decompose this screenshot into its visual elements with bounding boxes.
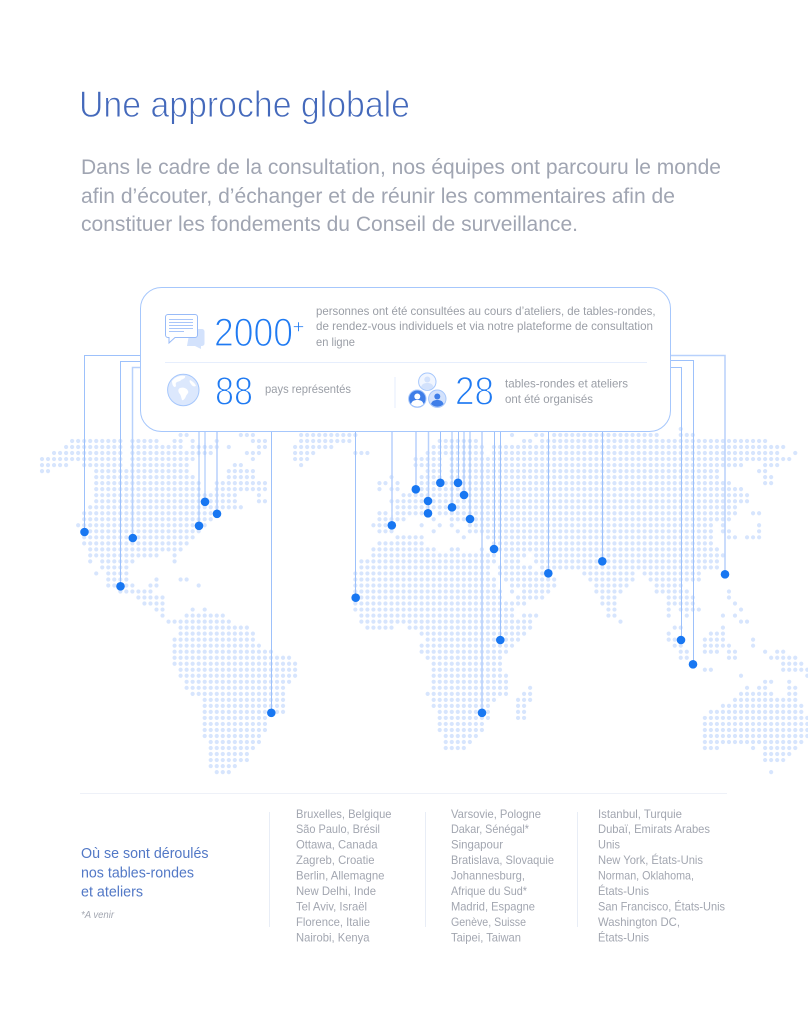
text: consultation description: personnes ont été consultées au cours d’ateliers, de tables-rondes, [316,304,656,318]
panel: key figures [140,288,670,432]
city list: column 3: Norman, Oklahoma, [598,869,694,883]
city list: column 1: Zagreb, Croatie [296,853,375,867]
intro paragraph: constituer les fondements du Conseil de surveillance. [81,213,578,236]
stat: 88: 88 [215,370,253,414]
city list: column 3: San Francisco, États-Unis [598,898,725,914]
city list: column 2: Bratislava, Slovaquie [451,853,554,867]
city list: column 3: New York, États-Unis [598,852,703,867]
city list: column 2: Dakar, Sénégal* [451,822,529,836]
city list: column 2: Afrique du Sud* [451,884,527,898]
text: tables-rondes et ateliers [505,376,628,406]
city list: column 1: Berlin, Allemagne [296,869,385,883]
text: pays représentés: pays représentés [265,382,351,396]
connector lines [84,356,725,713]
city list: column 1: New Delhi, Inde [296,884,376,898]
city list: column 2: Johannesburg, [451,869,525,883]
text: consultation description: en ligne [316,335,355,349]
city list: column 1: Tel Aviv, Israël [296,900,367,914]
city list: column 2: Genève, Suisse [451,915,526,929]
city list: column 1: Ottawa, Canada [296,838,378,852]
location pins [80,478,729,717]
city list: column 1: Bruxelles, Belgique [296,807,392,821]
heading: locations: Où se sont déroulés [81,846,208,862]
title: Une approche globale [79,84,410,125]
stat: 2000+: + [292,317,304,338]
text: consultation description: de rendez-vous individuels et via notre plateforme de consultation [316,319,653,333]
dotted world map [42,429,807,772]
city list: column 1: Florence, Italie [296,915,370,929]
icon: globe [168,374,199,406]
city list: column 1: Nairobi, Kenya [296,930,370,944]
city list: column 3: États-Unis [598,929,649,944]
intro paragraph: afin d’écouter, d’échanger et de réunir les commentaires afin de [81,185,675,208]
city list: column 2: Singapour [451,838,503,852]
footnote: *A venir [81,909,114,921]
city list: column 2: Madrid, Espagne [451,900,535,914]
intro paragraph: Dans le cadre de la consultation, nos équipes ont parcouru le monde [81,156,721,179]
city list: column 3: Washington DC, [598,915,680,929]
icon: chat bubbles [166,314,204,349]
city list: column 3: Istanbul, Turquie [598,807,682,821]
text: tables-rondes et ateliers: tables-rondes et ateliers [505,376,628,390]
heading: locations: nos tables-rondes [81,866,194,882]
heading: locations: et ateliers [81,884,143,900]
city list: column 2 [451,807,554,944]
text: consultation description [316,304,656,349]
intro paragraph [81,156,721,236]
city list: column 3: États-Unis [598,883,649,898]
stat: 2000+: 2000 [214,311,293,355]
city list: column 3: Unis [598,838,620,852]
text: tables-rondes et ateliers: ont été organisés [505,392,593,406]
panel background [140,288,670,432]
heading: locations [81,846,208,900]
city list: column 2: Varsovie, Pologne [451,807,541,821]
city list: column 1: São Paulo, Brésil [296,822,380,836]
icon: people [409,373,446,407]
city list: column 3 [598,807,725,944]
city list: column 2: Taipei, Taiwan [451,930,521,944]
stat: 28: 28 [455,370,494,414]
city list: column 1 [296,807,392,944]
city list: column 3: Dubaï, Emirats Arabes [598,822,710,836]
